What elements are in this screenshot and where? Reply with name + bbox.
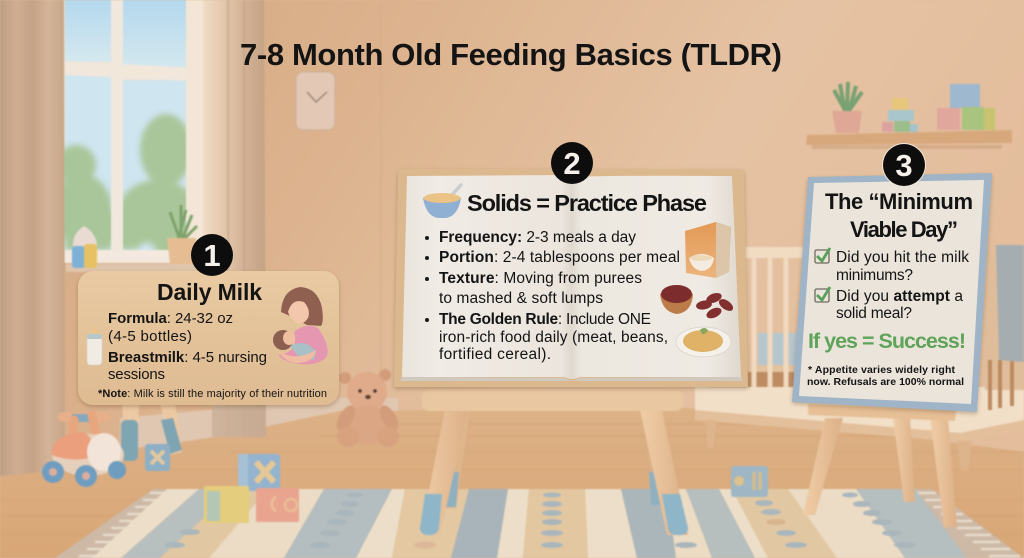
panel 2: solids	[394, 142, 748, 387]
panel 2 number badge	[551, 142, 593, 184]
easel top bar	[808, 404, 956, 421]
teddy bear	[333, 369, 402, 447]
shelf	[806, 130, 1012, 149]
icon: cereal box	[685, 222, 731, 278]
panel 1 formula text: Formula: 24-32 oz	[108, 310, 233, 327]
panel 3 number badge: 3	[895, 148, 913, 183]
right curtain	[203, 0, 266, 437]
floor blocks stack	[204, 454, 299, 523]
shelf plant	[832, 82, 862, 133]
panel 1 number badge: 1	[203, 238, 221, 273]
panel 2 table front legs	[420, 410, 688, 535]
panel 2 table back legs	[444, 410, 663, 508]
open book	[394, 169, 748, 387]
whiteboard surface	[799, 180, 984, 404]
panel 3 number badge	[882, 143, 926, 187]
floor block right	[731, 466, 768, 497]
icon: bowl of beans	[660, 285, 735, 320]
check item 1 line 2: minimums?	[836, 267, 913, 284]
check item 1 line 1: Did you hit the milk	[836, 249, 969, 266]
baseboard	[120, 398, 398, 450]
icon: checkbox 2	[815, 287, 830, 302]
appetite note line 2: now. Refusals are 100% normal	[807, 376, 964, 388]
panel 2 table top	[422, 390, 683, 411]
toy car	[42, 415, 126, 487]
small block near car	[145, 444, 170, 471]
icon: checkbox 1	[815, 248, 830, 263]
panel 2 bullet list: Frequency: 2-3 meals a day	[439, 229, 636, 246]
wall clock	[296, 72, 335, 130]
window	[52, 0, 204, 272]
panel 2 bullet list: iron-rich food daily (meat, beans,	[439, 329, 668, 346]
panel 1: daily milk	[78, 234, 339, 405]
panel 1 note: *Note: Milk is still the majority of their nutrition	[98, 388, 327, 400]
panel 1 breastmilk text: Breastmilk: 4-5 nursing	[108, 349, 267, 366]
icon: baby bottle	[87, 326, 102, 365]
panel 2 number badge: 2	[563, 146, 581, 181]
title: 7-8 Month Old Feeding Basics (TLDR)	[240, 37, 782, 72]
panel 1 number badge	[191, 234, 233, 276]
whiteboard frame	[792, 173, 992, 412]
panel 2 bullet list: Texture: Moving from purees	[439, 270, 642, 287]
shelf blocks	[882, 84, 995, 132]
panel 3 heading line 2: Viable Day”	[850, 217, 958, 242]
panel 2 bullet list: fortified cereal).	[439, 346, 551, 363]
panel 1 heading: Daily Milk	[157, 279, 262, 305]
panel 2 bullet list: Portion: 2-4 tablespoons per meal	[439, 249, 680, 266]
wooden floor	[0, 408, 1024, 558]
panel 3: minimum viable day	[792, 143, 992, 412]
check item 2 line 1: Did you attempt a	[836, 288, 963, 305]
panel 2 bullet list	[425, 229, 680, 363]
panel 1 sessions text: sessions	[108, 366, 165, 383]
check item 2 line 2: solid meal?	[836, 305, 912, 322]
crib blanket	[996, 245, 1024, 362]
rug	[55, 489, 1024, 558]
panel 2 heading: Solids = Practice Phase	[467, 190, 707, 216]
icon: cereal bowl	[423, 185, 461, 218]
panel 2 bullet list: to mashed & soft lumps	[439, 290, 603, 307]
panel 2 bullet list: The Golden Rule: Include ONE	[439, 311, 651, 328]
success message: If yes = Success!	[808, 329, 966, 353]
icon: mother nursing baby	[273, 287, 328, 364]
left curtain	[0, 0, 65, 476]
icon: plate of puree	[676, 327, 731, 357]
appetite note line 1: * Appetite varies widely right	[808, 364, 956, 376]
panel 1 bottles text: (4-5 bottles)	[108, 328, 192, 345]
panel 3 heading line 1: The “Minimum	[825, 189, 973, 214]
panel 1 wooden board	[78, 271, 339, 405]
crib	[695, 247, 1024, 471]
window plant	[167, 205, 197, 264]
window toy bottle	[72, 226, 97, 268]
panel 1 table legs	[121, 402, 182, 461]
easel legs	[803, 418, 957, 527]
